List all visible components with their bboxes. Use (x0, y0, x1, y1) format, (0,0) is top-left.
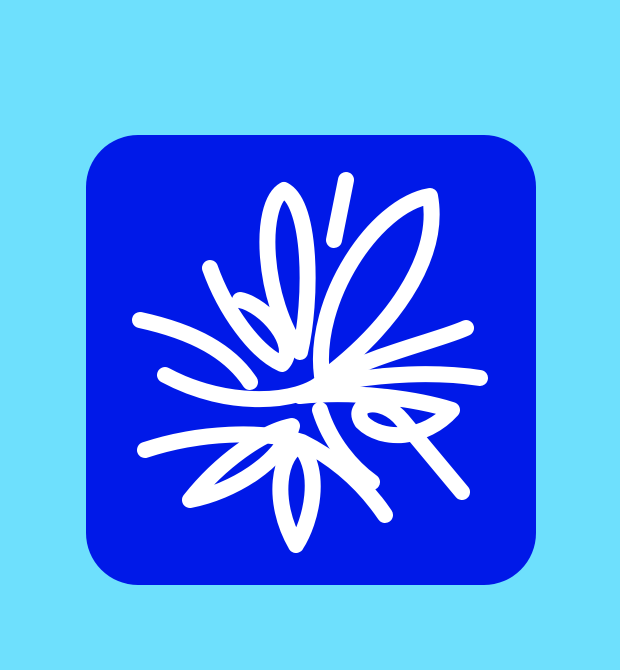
icon: white flower scribble (140, 180, 480, 545)
panel: blue rounded square (86, 135, 536, 585)
